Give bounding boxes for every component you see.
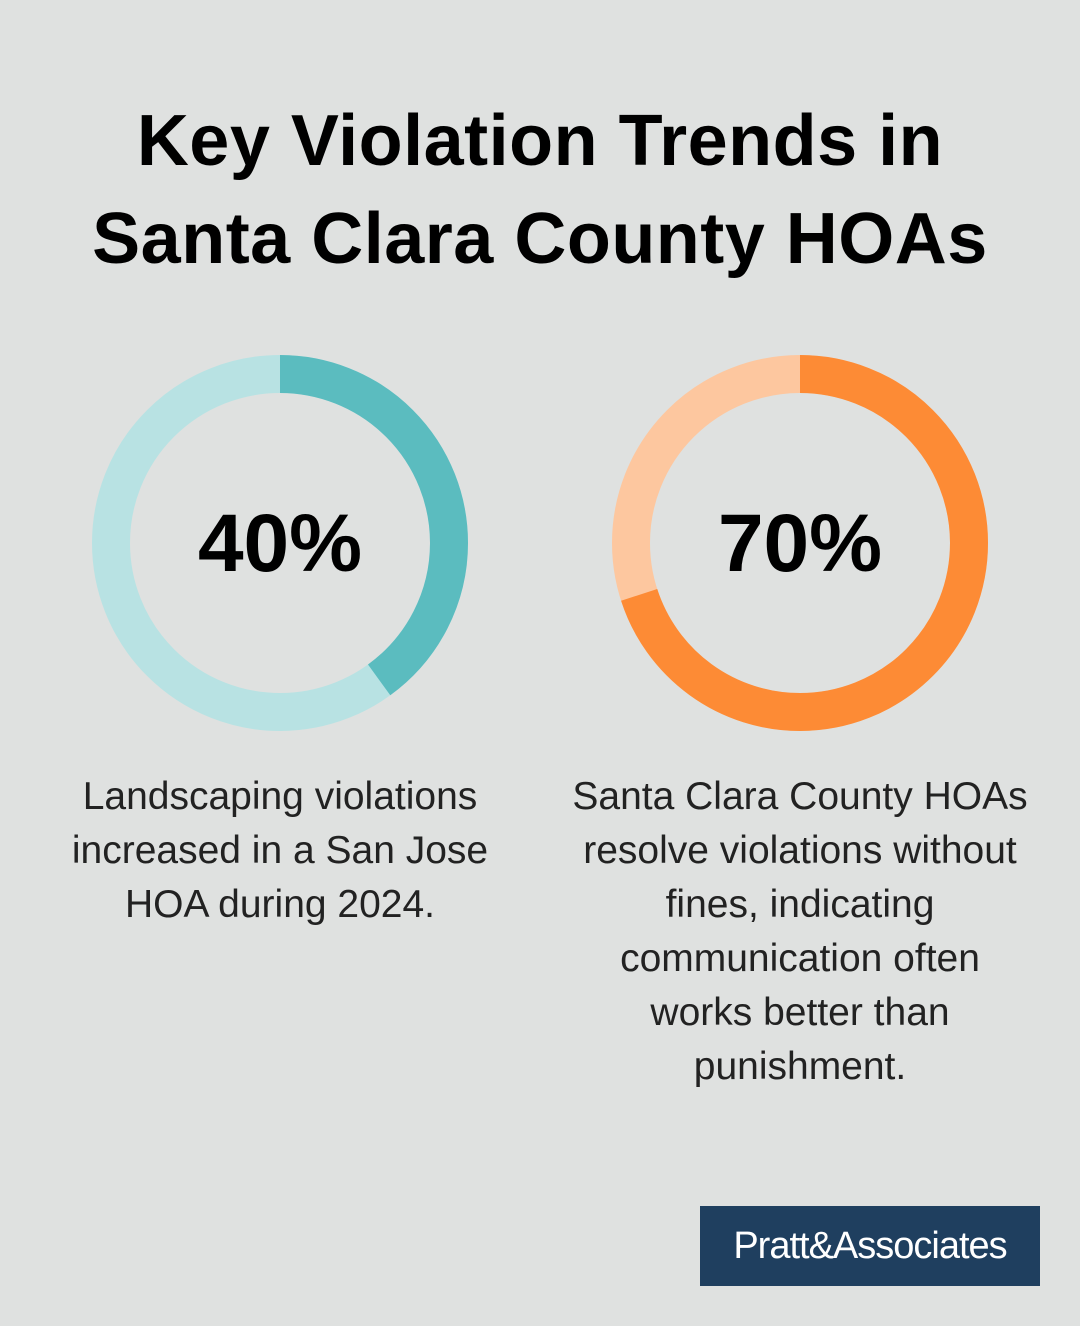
title: Santa Clara County HOAs bbox=[92, 199, 988, 279]
title bbox=[92, 101, 988, 279]
text: landscaping description: Landscaping violations bbox=[83, 775, 477, 818]
donut chart: 40% bbox=[92, 355, 468, 731]
text: resolution description: fines, indicating bbox=[666, 883, 934, 926]
logo bbox=[700, 1206, 1040, 1286]
text: resolution description: Santa Clara County HOAs bbox=[572, 775, 1028, 818]
text: landscaping description bbox=[72, 775, 488, 926]
logo: Pratt&Associates bbox=[733, 1225, 1007, 1267]
text: resolution description: works better than bbox=[650, 991, 950, 1034]
text: resolution description bbox=[572, 775, 1028, 1088]
donut chart: 70% bbox=[612, 355, 988, 731]
text: resolution description: resolve violations without bbox=[583, 829, 1017, 872]
text: landscaping description: increased in a San Jose bbox=[72, 829, 488, 872]
text: resolution description: punishment. bbox=[694, 1045, 906, 1088]
donut chart: 70%: 70% bbox=[718, 498, 882, 589]
text: resolution description: communication often bbox=[620, 937, 980, 980]
donut chart: 40%: 40% bbox=[198, 498, 362, 589]
text: landscaping description: HOA during 2024. bbox=[125, 883, 435, 926]
title: Key Violation Trends in bbox=[137, 101, 943, 181]
